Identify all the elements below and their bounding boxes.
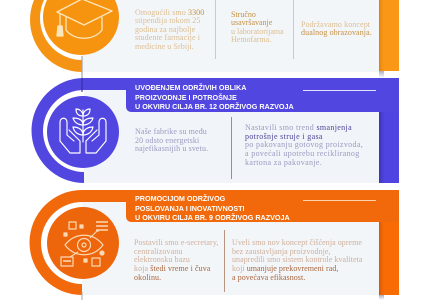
text: consumption reduction: po pakovanju gotovog proizvoda, [245,140,363,149]
text: scholarships: Omogućili smo 3300 [135,8,204,16]
text: professional training: Hemofarma. [231,35,271,44]
heading: sustainable business: POSLOVANJA I INOVATIVNOSTI [135,204,245,213]
text: dual education: Podržavamo koncept [301,20,370,28]
heading: sustainable production: U OKVIRU CILJA BR. 12 ODRŽIVOG RAZVOJA [135,102,294,111]
text: e-secretary: koja štedi vreme i čuva [134,264,211,273]
text: consumption reduction: a povećali upotrebu recikliranog [245,149,360,158]
panel 2: sustainable production [32,78,399,183]
text: scholarships: godina za najbolje [135,25,195,34]
text: consumption reduction: potrošnje struje i gasa [245,132,323,141]
text: consumption reduction [245,123,363,167]
text: professional training [231,10,284,44]
icon: eye with gear and circuits [61,222,108,266]
heading: sustainable business: PROMOCIJOM ODRŽIVOG [135,194,225,203]
text: consumption reduction: Nastavili smo trend smanjenja [245,123,352,132]
text: dual education: dualnog obrazovanja. [301,28,372,37]
text: new concept [232,238,362,282]
heading: sustainable production [135,83,294,111]
icon: graduation cap [57,0,112,38]
text: factories: 20 odsto energetski [135,136,199,145]
text: scholarships: stipendija tokom 25 [135,16,200,25]
text: new concept: koji umanjuje prekovremeni rad, [232,264,338,273]
text: professional training: Stručno [231,10,256,18]
text: new concept: bez zaustavljanja proizvodnje, [232,247,331,256]
text: factories [135,127,208,153]
heading: sustainable business [135,194,290,222]
heading: sustainable production: UVOĐENJEM ODRŽIVIH OBLIKA [135,83,246,92]
text: e-secretary: elektronsku bazu [134,255,190,264]
text: e-secretary: Postavili smo e-secretary, [134,238,219,247]
panel 1: education [30,0,399,78]
text: new concept: unapredili smo sistem kontrole kvaliteta [232,255,362,264]
text: new concept: Uveli smo nov koncept čišćenja opreme [232,238,362,247]
text: e-secretary: centralizovanu [134,247,182,256]
text: e-secretary: okolinu. [134,273,161,282]
text: professional training: usavršavanje [231,18,272,27]
text: new concept: a povećava efikasnost. [232,273,305,282]
decorative rules [303,90,376,91]
text: scholarships [135,8,204,51]
heading: sustainable business: U OKVIRU CILJA BR. 9 ODRŽIVOG RAZVOJA [135,213,290,222]
heading: sustainable production: PROIZVODNJE I POTROŠNJE [135,93,237,102]
text: scholarships: medicine u Srbiji. [135,42,194,51]
text: consumption reduction: kartona za pakovanje. [245,158,322,167]
text: factories: Naše fabrike su među [135,127,207,136]
text: dual education [301,20,372,37]
icon: hands with plant [60,109,106,153]
panel 3: sustainable business [30,190,399,300]
text: e-secretary [134,238,219,282]
text: professional training: u laboratorijama [231,27,284,36]
text: factories: najefikasnijih u svetu. [135,144,208,153]
text: scholarships: studente farmacije i [135,33,200,42]
